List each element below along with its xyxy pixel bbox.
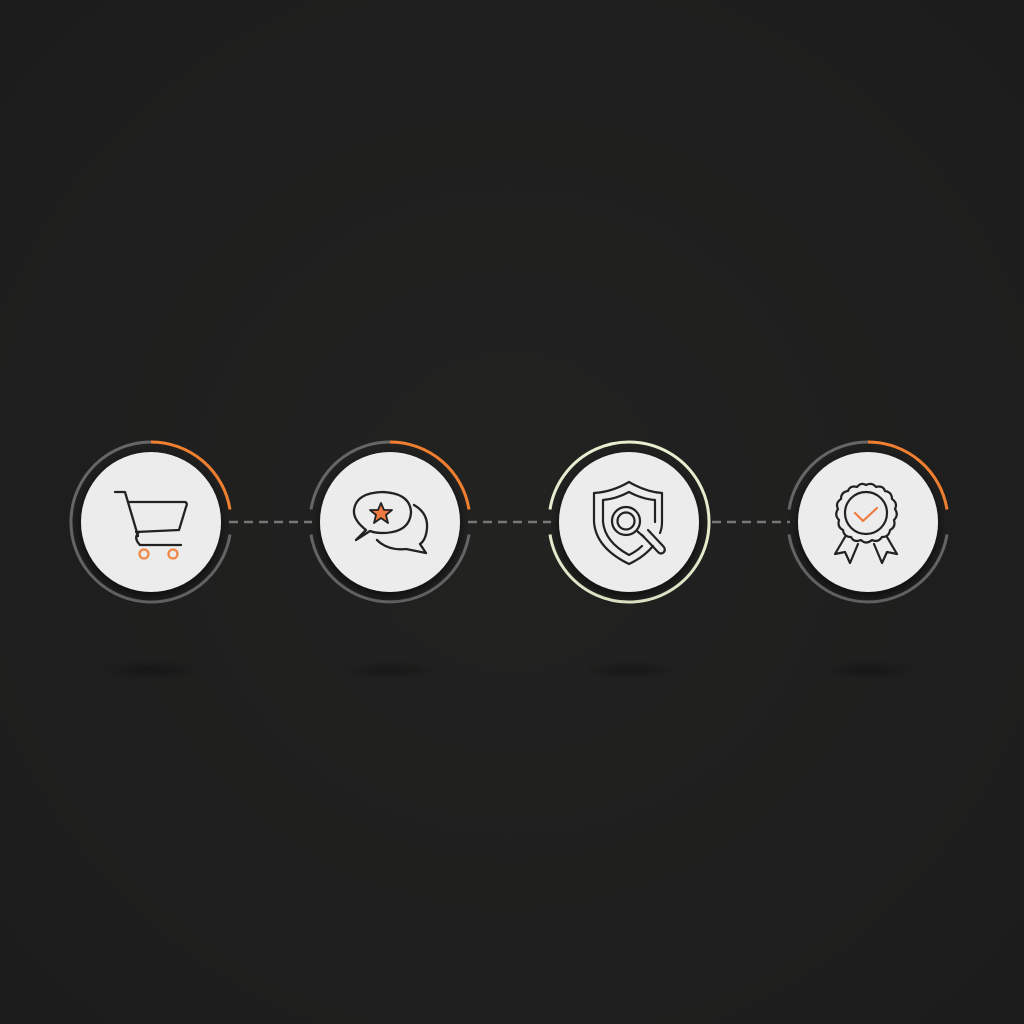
- icon: speech bubbles with star: [354, 492, 427, 553]
- icon: rosette with check: [835, 484, 897, 563]
- icon: cart: [115, 492, 187, 558]
- step 4: award rosette: [789, 442, 947, 602]
- icon: shield with magnifier: [594, 482, 665, 564]
- floor shadows: [101, 660, 918, 680]
- step 1: shopping cart: [71, 442, 230, 602]
- connector: dashed lines: [229, 521, 790, 523]
- step 3: security inspection (active): [550, 442, 709, 602]
- step 2: review bubbles: [311, 442, 469, 602]
